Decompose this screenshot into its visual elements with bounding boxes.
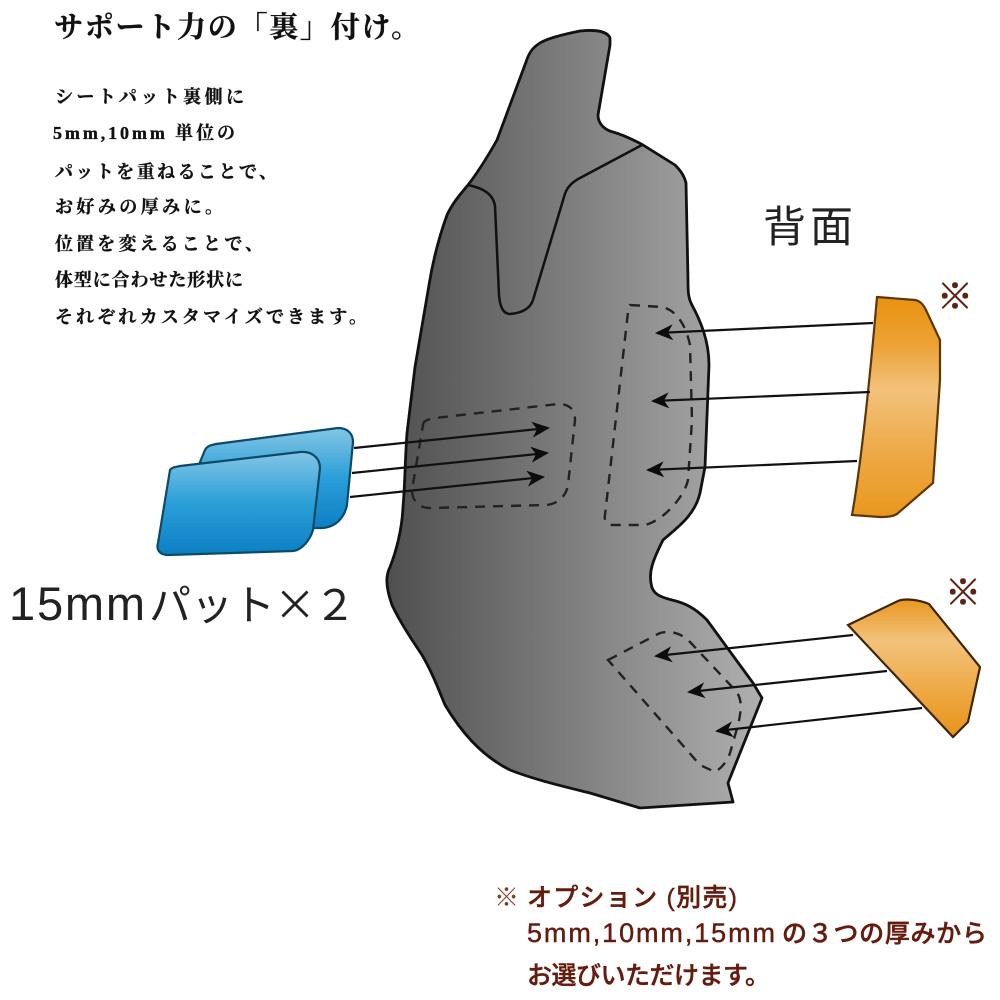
- orange pads: [848, 297, 980, 737]
- blue pad rear: [200, 428, 353, 528]
- description text block: それぞれカスタマイズできます。: [55, 307, 367, 327]
- option note: お選びいただけます。: [527, 962, 770, 990]
- option note: [494, 884, 987, 990]
- option note: の３つの厚みから: [782, 920, 987, 948]
- arrows: [350, 323, 922, 731]
- note mark: ※: [494, 884, 519, 912]
- arrows: blue pad to seat: [350, 428, 548, 497]
- seat outline: [387, 30, 762, 808]
- dashed zone: lower: [608, 632, 741, 772]
- option note: 5mm,10mm,15mm: [527, 918, 775, 948]
- arrows: upper orange pad to seat: [648, 323, 873, 470]
- dashed zone: back: [605, 305, 692, 525]
- label: 15mm pad x2: パット: [149, 582, 275, 629]
- label: 15mm pad x2: ２: [314, 572, 356, 633]
- asterisk mark upper: ※: [937, 276, 973, 317]
- label: 15mm pad x2: 15mm: [9, 577, 145, 630]
- description text block: パットを重ねることで、: [55, 162, 277, 182]
- note text: オプション (別売): [527, 884, 737, 912]
- description text block: [53, 86, 367, 327]
- orange pad upper: [852, 297, 940, 517]
- dashed zone: lumbar left: [412, 404, 575, 508]
- blue pad front: [157, 452, 320, 555]
- description text block: お好みの厚みに。: [55, 197, 223, 217]
- arrows: lower orange pad to seat: [656, 635, 922, 731]
- title: サポート力の「裏」付け。: [54, 11, 420, 44]
- seat pad back view: [387, 30, 762, 808]
- description text block: シートパット裏側に: [55, 86, 244, 107]
- description text block: 位置を変えることで、: [55, 234, 263, 254]
- label: 15mm pad x2: [9, 572, 356, 633]
- label: back side: 背面: [763, 204, 853, 252]
- orange pad lower: [848, 600, 980, 737]
- blue pads: [157, 428, 353, 555]
- asterisk mark lower: ※: [945, 572, 981, 613]
- description text block: 体型に合わせた形状に: [55, 269, 243, 290]
- label: 15mm pad x2: ×: [274, 572, 316, 633]
- headrest seam: [468, 145, 642, 314]
- description text block: 5mm,10mm 単位の: [53, 123, 235, 143]
